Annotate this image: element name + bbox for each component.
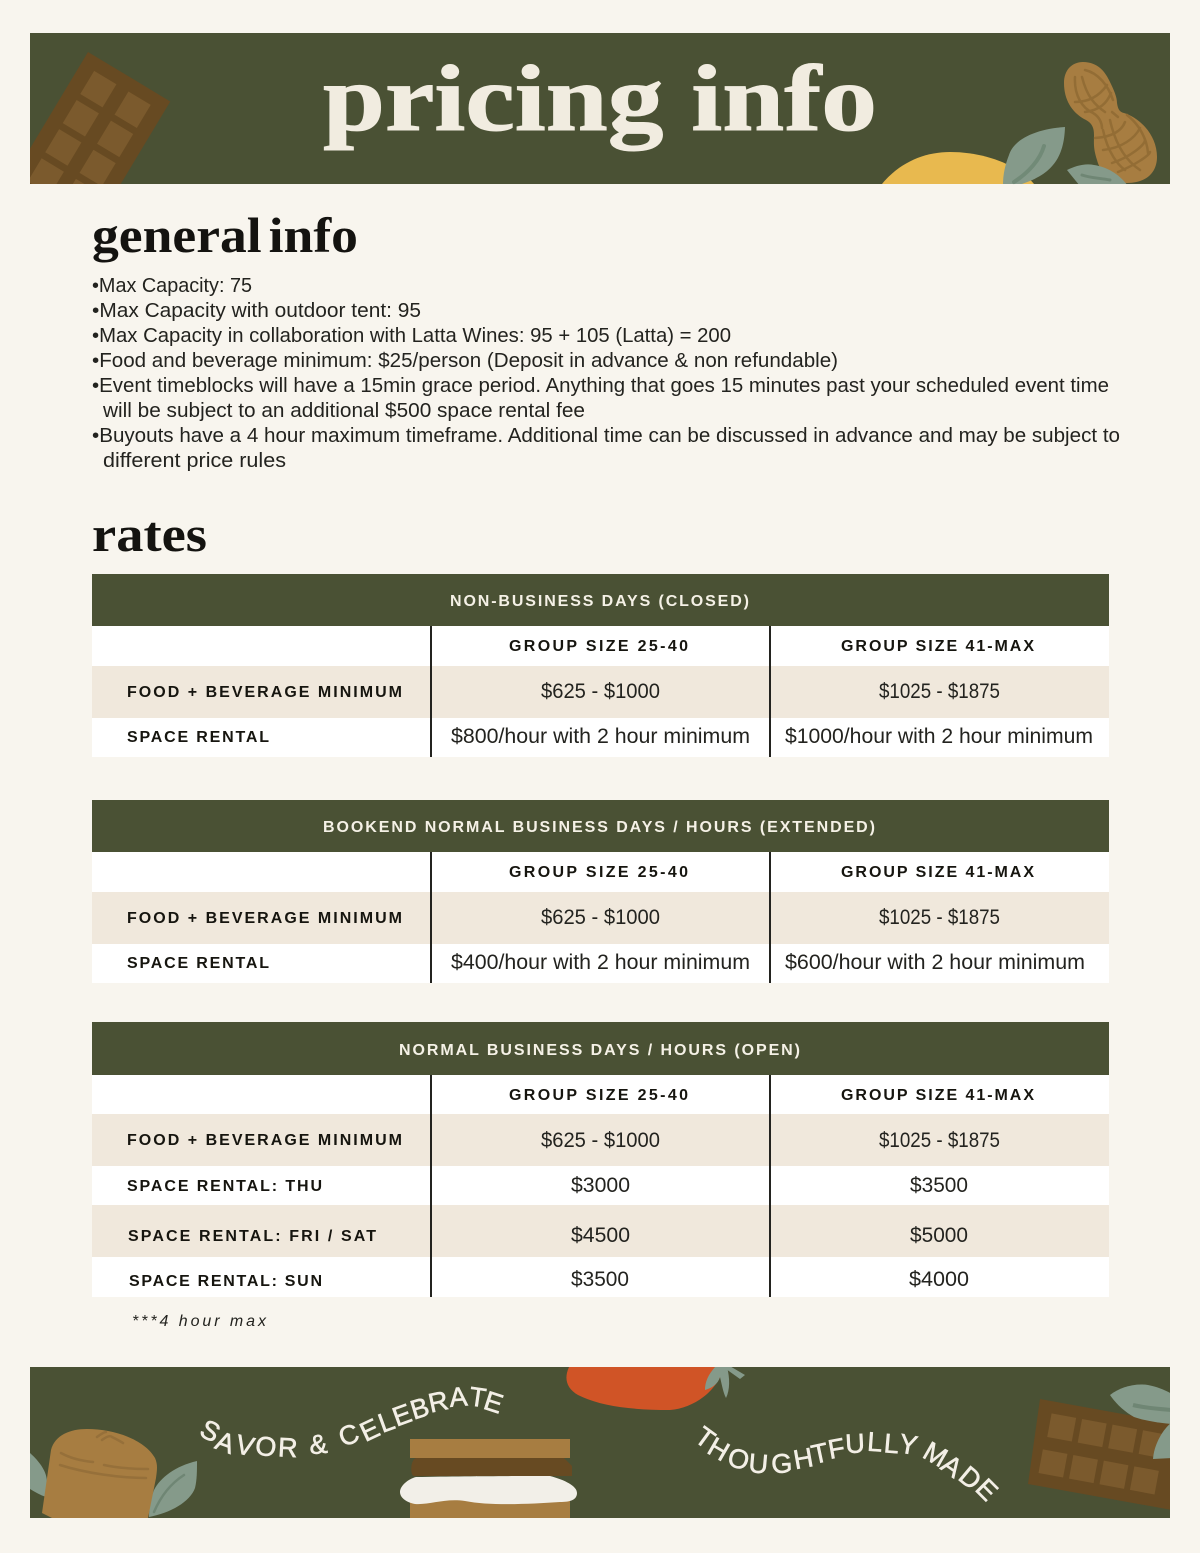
panel: normal business days table: $5000 [910,1224,968,1247]
icon: tomato [566,1365,745,1410]
panel: bookend business days table: BOOKEND NORMAL BUSINESS DAYS / HOURS (EXTENDED) [323,819,875,836]
panel: normal business days table: GROUP SIZE 25-40 [509,1087,688,1104]
panel: non-business days table: FOOD + BEVERAGE MINIMUM [127,684,402,701]
panel: bookend business days table: $600/hour with 2 hour minimum [785,951,1085,974]
panel: normal business days table: FOOD + BEVERAGE MINIMUM [127,1132,402,1149]
text block: general info bullets [92,275,1120,472]
icon: chocolate bar [1028,1384,1172,1510]
text block: general info bullets: •Max Capacity with outdoor tent: 95 [92,300,421,322]
panel: non-business days table: NON-BUSINESS DAYS (CLOSED) [450,593,749,610]
title: pricing info [323,47,877,151]
panel: non-business days table: SPACE RENTAL [127,729,269,746]
panel: bookend business days table: FOOD + BEVERAGE MINIMUM [127,910,402,927]
panel: normal business days table: SPACE RENTAL: SUN [129,1273,322,1290]
panel: normal business days table: $1025 - $1875 [879,1129,1000,1152]
icon: mango [882,152,1034,184]
panel: non-business days table: $625 - $1000 [541,680,660,703]
panel: bookend business days table: $625 - $1000 [541,906,660,929]
icon: small leaf [1067,164,1128,186]
panel: bookend business days table: SPACE RENTAL [127,955,269,972]
panel: normal business days table: $3500 [910,1174,968,1197]
text block: general info bullets: •Event timeblocks will have a 15min grace period. Anything that goes 15 minutes past your scheduled event time [92,375,1109,397]
panel: bookend business days table: GROUP SIZE 25-40 [509,864,688,881]
icon: right leaf [149,1461,197,1517]
panel: normal business days table: $3500 [571,1268,629,1291]
curved text: savor & celebrate: SAVOR & CELEBRATE [195,1381,507,1463]
curved text: thoughtfully made: THOUGHTFULLY MADE [689,1421,1004,1507]
panel: bookend business days table: $400/hour with 2 hour minimum [451,951,750,974]
heading: general info: general info [92,207,358,263]
panel: non-business days table: GROUP SIZE 25-40 [509,638,688,655]
panel: non-business days table: $1025 - $1875 [879,680,1000,703]
panel: normal business days table: SPACE RENTAL: FRI / SAT [128,1228,376,1245]
icon: left leaf [30,1453,47,1497]
panel: normal business days table: $4500 [571,1224,630,1247]
panel: normal business days table: $625 - $1000 [541,1129,660,1152]
text block: general info bullets: different price rules [103,450,286,472]
panel: normal business days table: SPACE RENTAL: THU [127,1178,322,1195]
text block: general info bullets: •Max Capacity in collaboration with Latta Wines: 95 + 105 (Latta) = 200 [92,325,731,347]
icon: s'more [400,1439,577,1518]
icon: chocolate bar [30,52,170,184]
text block: general info bullets: •Buyouts have a 4 hour maximum timeframe. Additional time can be discussed in advance and may be subject to [92,425,1120,447]
panel: bottom banner [30,1365,1172,1518]
panel: normal business days table: $4000 [909,1268,969,1291]
heading: rates: rates [92,506,207,562]
panel: non-business days table: $800/hour with 2 hour minimum [451,725,750,748]
icon: peanut [1064,62,1157,183]
panel: bookend business days table: GROUP SIZE 41-MAX [841,864,1034,881]
icon: bread loaf [42,1429,157,1518]
text block: general info bullets: •Max Capacity: 75 [92,275,252,297]
footnote: ***4 hour max [132,1313,267,1330]
text block: general info bullets: •Food and beverage minimum: $25/person (Deposit in advance & non refundable) [92,350,838,372]
panel: normal business days table: GROUP SIZE 41-MAX [841,1087,1034,1104]
panel: non-business days table [92,574,1109,757]
text block: general info bullets: will be subject to an additional $500 space rental fee [102,400,585,422]
panel: normal business days table: NORMAL BUSINESS DAYS / HOURS (OPEN) [399,1042,800,1059]
panel: bookend business days table [92,800,1109,983]
icon: large leaf [1003,127,1065,184]
panel: normal business days table [92,1022,1109,1297]
panel: normal business days table: $3000 [571,1174,630,1197]
panel: top banner [30,33,1170,184]
panel: bookend business days table: $1025 - $1875 [879,906,1000,929]
panel: non-business days table: $1000/hour with 2 hour minimum [785,725,1093,748]
panel: non-business days table: GROUP SIZE 41-MAX [841,638,1034,655]
